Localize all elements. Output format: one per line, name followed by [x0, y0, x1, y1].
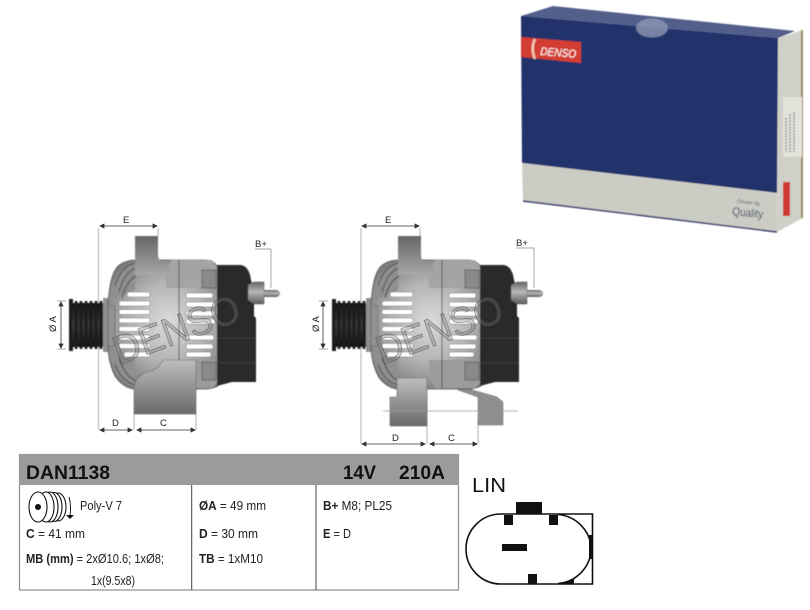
mounting foot rear right [455, 385, 503, 425]
dimensions right: C [448, 433, 455, 444]
dimensions right [311, 215, 534, 446]
column 3 text: E = D [323, 527, 351, 541]
column 2 text: ØA = 49 mm [199, 499, 266, 513]
box blue front [521, 16, 778, 193]
watermark right: DENSO [370, 287, 509, 373]
alternator housing left [108, 260, 218, 389]
dimensions right: D [392, 433, 399, 444]
table header band [19, 454, 459, 485]
DENSO logo label [521, 37, 581, 63]
lid seal sticker [636, 18, 668, 38]
Driven by Quality slogan: Driven by [737, 199, 761, 207]
dimensions left: C [160, 418, 167, 429]
box lid [521, 6, 795, 38]
pulley left [69, 298, 109, 352]
box grey lower band [522, 163, 777, 232]
specification table [19, 454, 459, 590]
dimensions left: Ø A [48, 315, 59, 332]
column 1 text [26, 499, 164, 588]
dimension guide lines left [98, 228, 196, 430]
column 2 text: D = 30 mm [199, 527, 258, 541]
table header band: 210A [399, 463, 445, 484]
dimensions right: B+ [516, 238, 528, 249]
bottom mounting ear left [134, 360, 196, 414]
icon: pulley [29, 492, 74, 522]
dimension guide lines right [361, 228, 478, 444]
dimensions right: Ø A [311, 315, 322, 332]
dimensions left: D [112, 418, 119, 429]
column 1 text: Poly-V 7 [80, 499, 122, 513]
machine group right [332, 236, 543, 389]
centre line right [383, 410, 518, 412]
column 3 text [323, 499, 392, 541]
alternator drawing left [48, 215, 280, 432]
dimensions left: B+ [255, 239, 267, 250]
bottom mounting foot front right [390, 378, 427, 426]
column 3 text: B+ M8; PL25 [323, 499, 392, 513]
column 2 text [199, 499, 266, 566]
connector diagram [466, 502, 593, 584]
dimensions left: E [123, 215, 129, 226]
table header band: DAN1138 [26, 463, 110, 484]
Driven by Quality slogan [732, 199, 764, 221]
dimensions left [48, 215, 271, 432]
Driven by Quality slogan: Quality [732, 206, 764, 221]
LIN heading: LIN [472, 475, 506, 497]
watermark left: DENSO [107, 287, 246, 373]
column 2 text: TB = 1xM10 [199, 552, 263, 566]
DENSO logo label: DENSO [540, 46, 577, 61]
alternator drawing right [311, 215, 543, 446]
column 1 text: MB (mm) = 2xØ10.6; 1xØ8; [26, 552, 164, 566]
table header band: 14V [343, 463, 376, 484]
dimensions right: E [385, 215, 391, 226]
table frame [20, 454, 458, 590]
column 1 text: 1x(9.5x8) [91, 574, 135, 588]
top mounting ear left [135, 236, 172, 275]
B+ terminal left [248, 282, 280, 304]
column 1 text: C = 41 mm [26, 527, 85, 541]
box side panel [777, 30, 803, 232]
product box [521, 6, 803, 232]
rear cover left [217, 265, 256, 386]
